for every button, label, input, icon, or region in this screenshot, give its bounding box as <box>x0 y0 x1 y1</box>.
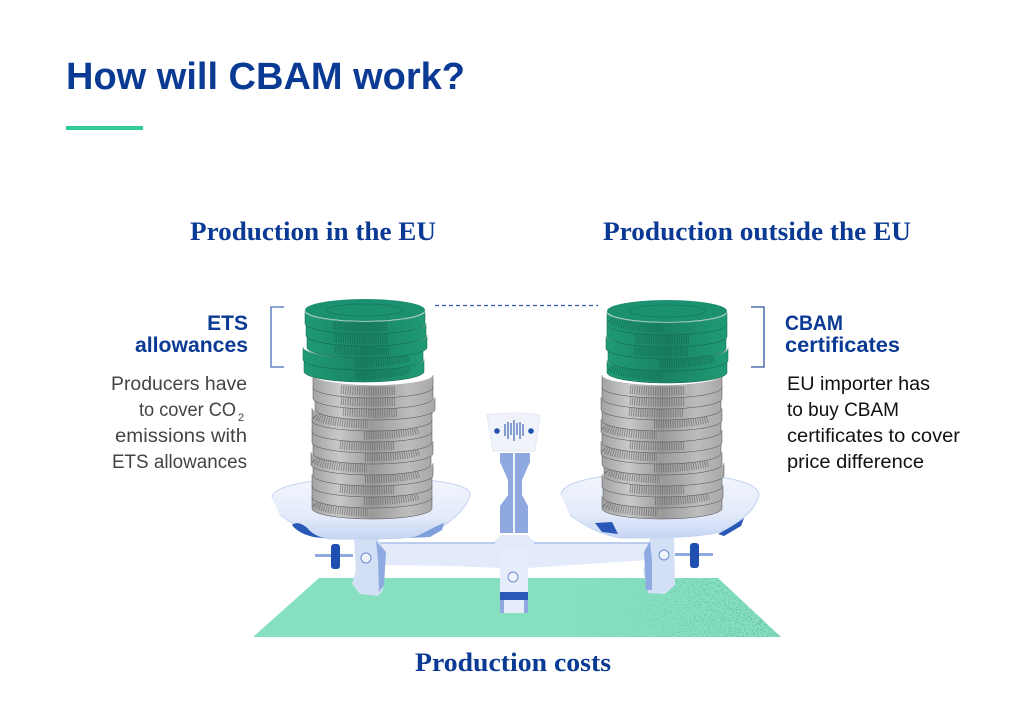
text: producers: 2 <box>238 412 244 424</box>
left pan <box>272 478 470 539</box>
green cost plane <box>253 578 781 637</box>
green coins <box>303 311 427 382</box>
green coins <box>606 312 728 383</box>
pointer dial <box>487 413 540 451</box>
text: producers: emissions with <box>115 426 247 447</box>
label: ETS allowances <box>135 312 248 357</box>
label: ETS allowances: allowances <box>135 334 248 357</box>
label: CBAM certificates: certificates <box>785 334 900 357</box>
text: EU importer: certificates to cover <box>787 426 961 447</box>
right pan <box>561 473 759 538</box>
right bracket <box>751 307 764 367</box>
scale beam <box>380 535 650 568</box>
left bracket <box>271 307 284 367</box>
text: producers: Producers have <box>111 374 247 395</box>
centre column <box>500 453 530 533</box>
text: EU importer <box>787 374 961 473</box>
silver coins <box>311 375 435 519</box>
silver coins <box>601 375 724 519</box>
text: producers: ETS allowances <box>112 452 247 473</box>
right coin stack <box>601 300 728 519</box>
text: EU importer: EU importer has <box>787 374 930 395</box>
left coin stack <box>303 299 435 519</box>
right hanger <box>643 538 675 594</box>
heading: production outside the EU: Production outside the EU <box>603 217 911 246</box>
dashed connector <box>435 304 598 306</box>
label: ETS allowances: ETS <box>207 312 248 335</box>
text: producers: to cover CO <box>139 400 236 421</box>
heading: production in the EU: Production in the EU <box>190 217 436 246</box>
label: CBAM certificates: CBAM <box>785 312 843 335</box>
balance scale <box>272 413 759 613</box>
text: EU importer: to buy CBAM <box>787 400 899 421</box>
title accent line <box>66 126 143 130</box>
text: EU importer: price difference <box>787 452 924 473</box>
left hanger <box>352 539 386 596</box>
text: producers <box>111 374 247 473</box>
label: CBAM certificates <box>785 312 900 357</box>
right adjusting screw <box>675 543 713 568</box>
left adjusting screw <box>315 544 353 569</box>
heading: production costs: Production costs <box>415 648 611 677</box>
title: How will CBAM work? <box>66 56 465 98</box>
